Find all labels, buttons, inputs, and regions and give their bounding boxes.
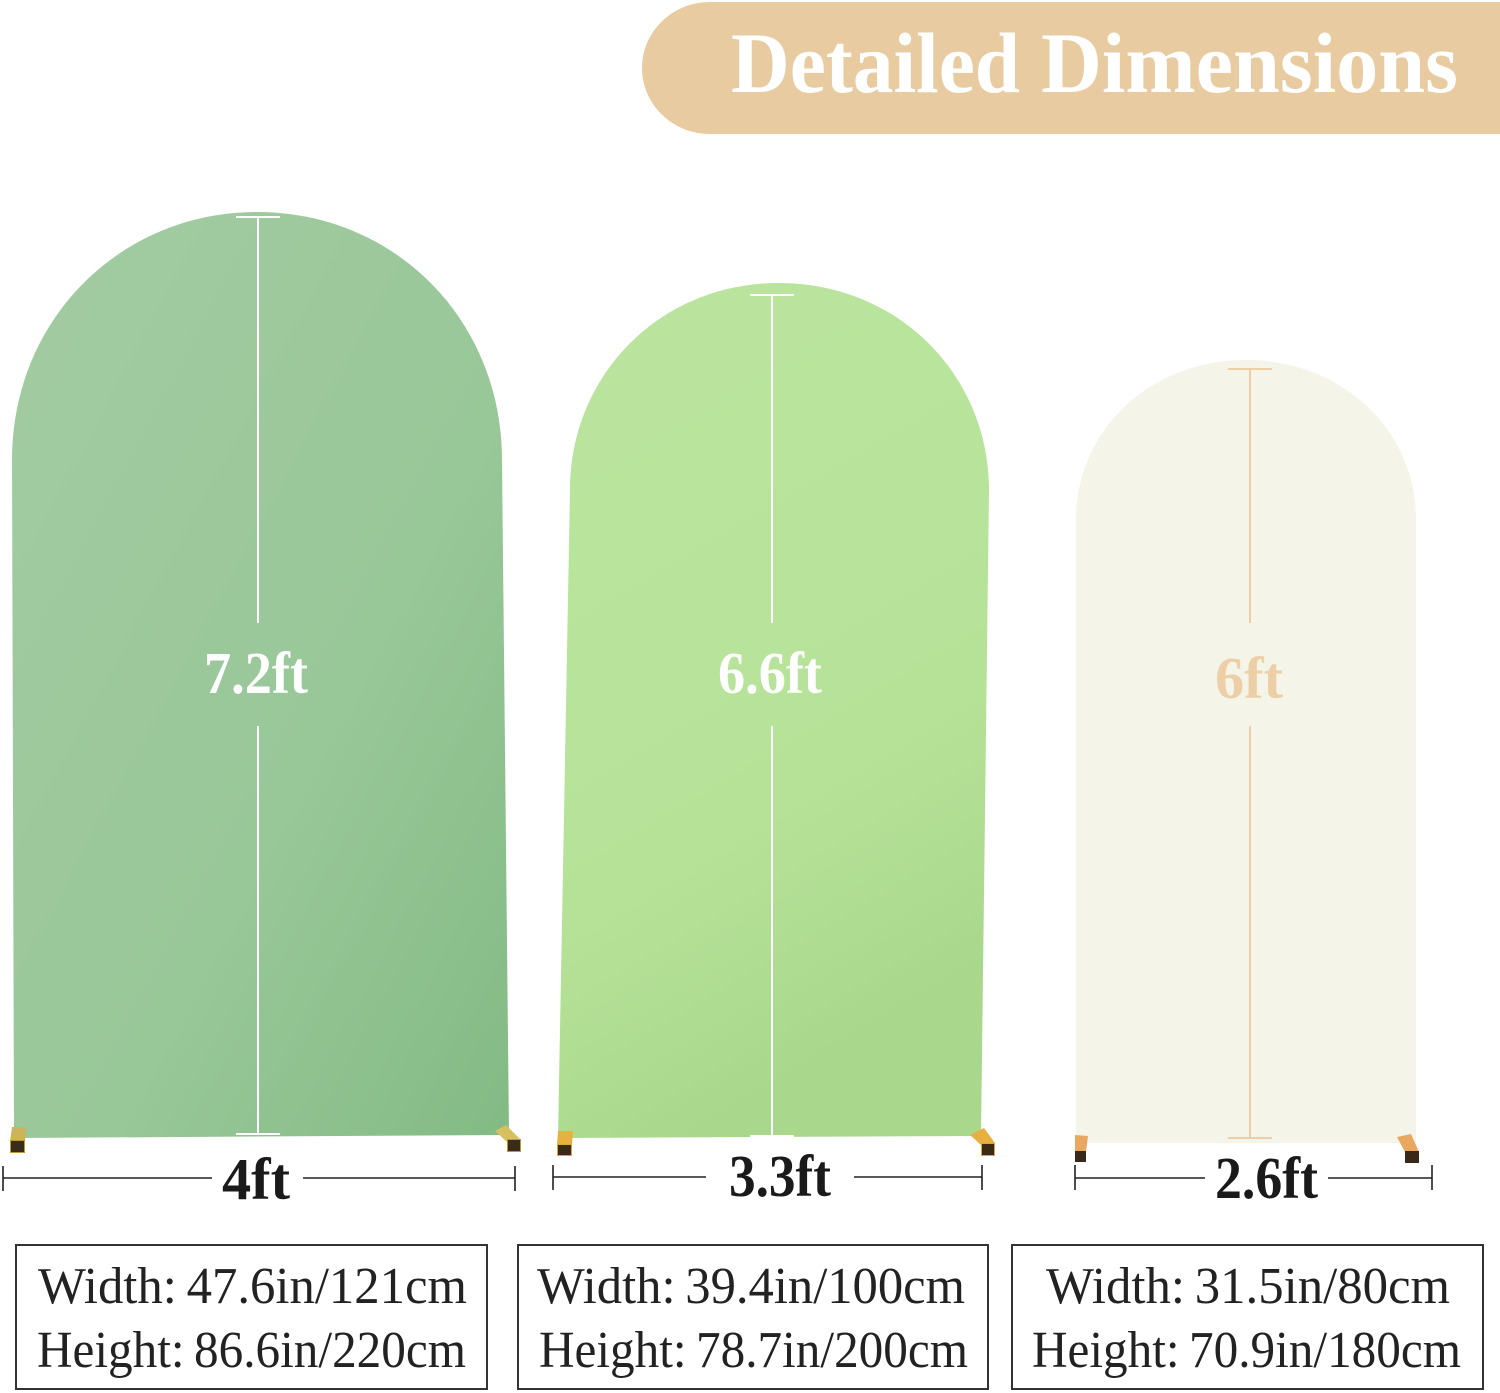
- panel: 7.2ft arch: [10, 212, 521, 1152]
- foot: right gold tube: [495, 1125, 521, 1152]
- width measure: 4ft: 4ft: [222, 1146, 290, 1212]
- height label: 6.6ft: [718, 640, 822, 706]
- width measure: 3.3ft: 3.3ft: [729, 1143, 831, 1209]
- arch shape: green: [12, 212, 509, 1138]
- spec box: 6ft arch: [1012, 1245, 1483, 1389]
- title banner: Detailed: [731, 15, 1020, 111]
- foot: left gold tube: [557, 1131, 573, 1156]
- height line: [750, 295, 794, 1136]
- title banner: Dimensions: [1041, 15, 1458, 111]
- spec box: 6ft arch: Width: 31.5in/80cm: [1046, 1258, 1450, 1315]
- spec box: 6.6ft arch: [518, 1245, 988, 1389]
- spec box: 6.6ft arch: Width: 39.4in/100cm: [537, 1258, 965, 1315]
- height line: [236, 217, 280, 1134]
- foot: right gold tube: [970, 1128, 995, 1156]
- height label: 6ft: [1215, 645, 1283, 711]
- spec box: 6ft arch: Height: 70.9in/180cm: [1032, 1322, 1461, 1379]
- foot: left gold tube: [10, 1127, 26, 1152]
- spec box: 7.2ft arch: Width: 47.6in/121cm: [38, 1258, 467, 1315]
- arch shape: cream: [1076, 360, 1416, 1143]
- foot: right copper tube: [1397, 1134, 1419, 1163]
- panel: 6.6ft arch: [557, 283, 995, 1156]
- spec box: 6.6ft arch: Height: 78.7in/200cm: [539, 1322, 968, 1379]
- height line: [1228, 369, 1272, 1138]
- arch shape: light green: [558, 283, 989, 1138]
- panel: 6ft arch: [1075, 360, 1419, 1163]
- width measure: 2.6ft: 2.6ft: [1215, 1145, 1318, 1211]
- height label: 7.2ft: [204, 640, 308, 706]
- spec box: 7.2ft arch: [16, 1245, 487, 1389]
- foot: left copper tube: [1075, 1135, 1088, 1162]
- spec box: 7.2ft arch: Height: 86.6in/220cm: [37, 1322, 466, 1379]
- title banner: [642, 2, 1500, 134]
